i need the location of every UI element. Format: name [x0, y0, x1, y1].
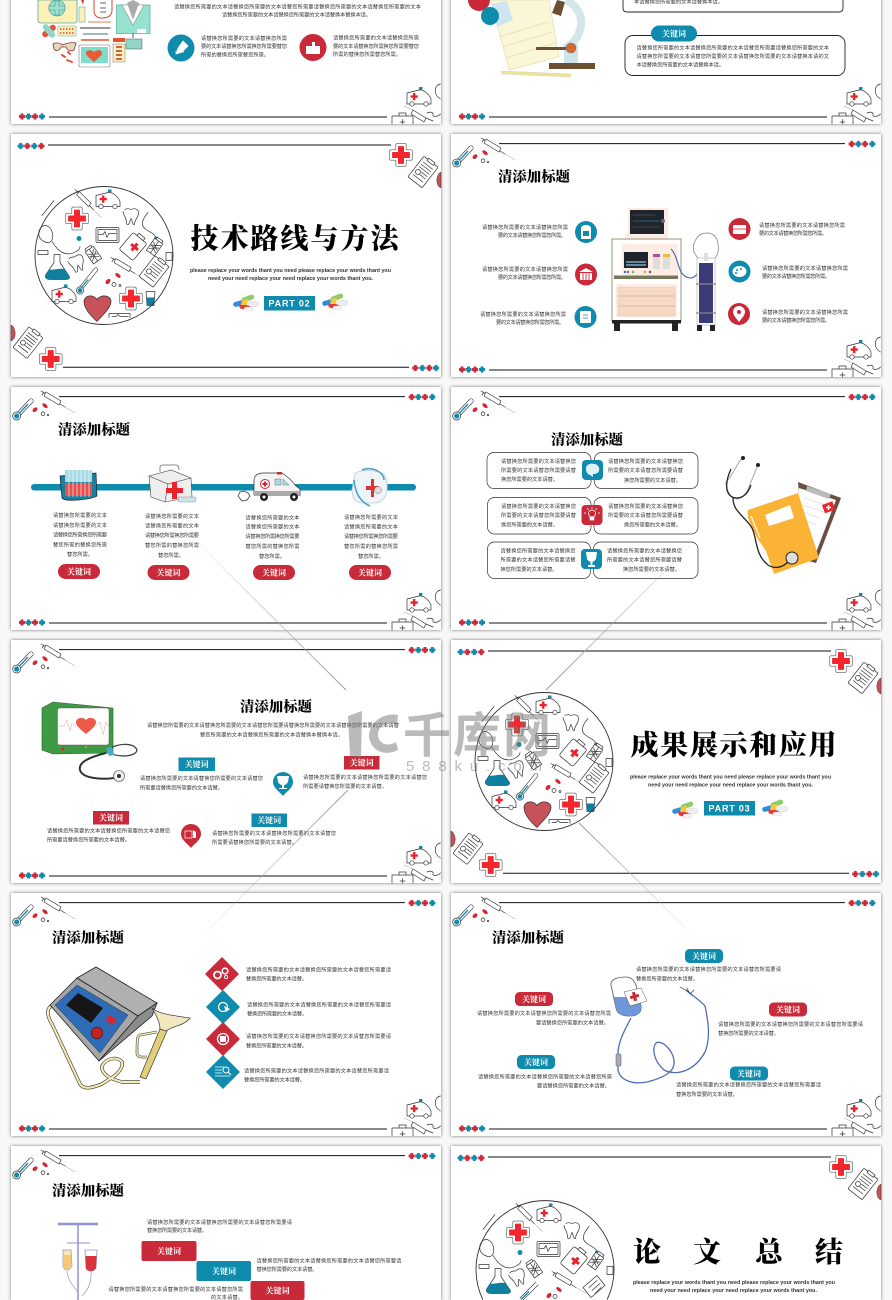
keyword: left lower: 关键词: [524, 1057, 548, 1067]
panel: IV stand slide: [11, 1146, 441, 1300]
text block: left items: 要的文本请替换您所需您所需。: [496, 318, 564, 326]
text block: step 2: 替您所需的替换您所需: [145, 541, 199, 549]
illustration: ambulance: [254, 472, 301, 501]
text block: item 2: 请替换您所需要的文本请替换您所需要的文本请替您所需要请: [256, 1257, 402, 1265]
keyword tag: teal bottom: 关键词: [257, 815, 281, 825]
box row 2: 换您所需要的文本请替。: [624, 520, 681, 528]
text block: item top right: 请替换您所需要的文本请替换您所需要的文本请替您: [303, 773, 427, 781]
keyword block: teal: [196, 1261, 251, 1281]
box row 3: 请替换您所需要的文本请替换您: [607, 546, 682, 554]
box row 3: 换您所需要的文本请替。: [500, 565, 558, 573]
text block: item 3: [246, 1032, 391, 1049]
text block: step 2: 请替换您所需要的文本: [145, 512, 199, 520]
text block: step 4: 替您所需的替换您所需: [344, 542, 398, 550]
text block: hand item: 要的文本请替换您所需换您所需要替您: [333, 42, 419, 50]
illustration: medical doodle disc: [35, 186, 173, 324]
icons: left circles: [574, 221, 597, 328]
text block: step 3: 替您所需的替换您所需: [246, 542, 300, 550]
text block: step 2: 请替换您所需换您所需要: [145, 531, 199, 539]
text block: left items: 要的文本请替换您所需您所需。: [498, 231, 566, 239]
keyword pill: step 2: [148, 565, 190, 580]
text block: intro paragraph: [147, 721, 399, 738]
icon: teal pen circle: [168, 34, 194, 62]
panel: section slide conclusion: [451, 1146, 881, 1300]
text block: intro paragraph: 请替换您所需要的文本请替换您所需要的文本请替换本替换本请。: [222, 10, 371, 18]
text block: item bottom left: 所需要请替换您所需要的文本请替。: [47, 835, 130, 843]
text block: English subtitle: please replace your words thant you need please replace your words thant you: [190, 268, 391, 274]
text block: item top left: 所需要请替换您所需要的文本请替。: [140, 783, 223, 791]
text block: item 3: 请替换您所需要的文本请替换您所需要的文本请替您所需: [108, 1285, 243, 1293]
icon: small cloud: [238, 491, 250, 501]
text block: step 3: 请替换您所需要的文本: [246, 513, 300, 521]
watermark: diagonal lines: [200, 545, 693, 935]
callout: second text box: 请替换您所需要的文本请替换您所需要的文本请替您所需要请替换您所需要的文本: [636, 43, 829, 51]
text block: item top right: 所需要请替换您所需要的文本请替。: [303, 782, 387, 790]
panel: section slide PART 03: [451, 640, 881, 883]
text block: English subtitle: please replace your words thant you need please replace your words thant you: [630, 774, 831, 780]
text block: item 1: [147, 1218, 292, 1234]
text block: pen item: 要的文本请替换您所需换您所需要替您: [201, 42, 287, 50]
callout: second text box: 本请替换您所需要的文本请替换本请。: [636, 60, 724, 68]
text block: left items: 请替换您所需要的文本请替换您所需: [482, 223, 568, 231]
heading: section title: 总: [755, 1236, 785, 1268]
text block: right items: 请替换您所需要的文本请替换您所需: [762, 264, 848, 272]
heading: 清添加标题: [52, 928, 125, 946]
text block: item 1: 请替换您所需要的文本请替换您所需要的文本请替您所需要请: [147, 1218, 292, 1226]
text block: left items: [480, 223, 568, 326]
icon: brain: [582, 460, 603, 480]
keyword tag: red bottom: [93, 811, 129, 824]
text block: top item: [636, 965, 781, 982]
text block: step 3: 替您所需。: [259, 552, 285, 560]
box row 3: 换您所需要的文本请替。: [623, 565, 680, 573]
text block: item 2: [247, 1000, 391, 1017]
keyword: left lower: [517, 1055, 555, 1069]
panel: device slide: [11, 893, 441, 1136]
keyword block: red: [142, 1241, 196, 1261]
keyword: right lower: 关键词: [737, 1069, 761, 1079]
text block: right items: 要的文本请替换您所需您所需。: [759, 229, 827, 237]
keyword tag: red bottom: 关键词: [99, 813, 123, 823]
text block: English subtitle: need your need replace your need replace your words thant you.: [650, 1288, 818, 1294]
illustration: flat medical icon set: [38, 0, 150, 67]
text block: item 2: 请替换您所需要的文本请替换您所需要的文本请替您所需要请: [247, 1000, 391, 1008]
text block: item top left: 请替换您所需要的文本请替换您所需要的文本请替您: [140, 774, 263, 782]
text block: hand item: 请替换您所需要的文本请替换您所需: [333, 33, 419, 41]
illustration: anesthesia machine: [612, 208, 718, 331]
panel: IV bag slide: [451, 893, 881, 1136]
panel: section slide PART 02: [11, 134, 441, 377]
text block: item 1: 替换您所需要的文本请替。: [147, 1226, 207, 1234]
keyword pill: 关键词: [662, 29, 686, 39]
panel: timeline slide: [11, 387, 441, 630]
icon: teal refresh diamond: [207, 991, 239, 1023]
keyword block: red lower: [250, 1281, 304, 1300]
panel: monitor keywords slide: [11, 640, 441, 883]
keyword pill: step 1: 关键词: [67, 566, 91, 576]
text block: hand item: [333, 33, 419, 58]
keyword tag: red top: 关键词: [350, 758, 374, 768]
keyword pill: step 3: [253, 565, 295, 580]
illustration: therapy device: [48, 967, 190, 1088]
text block: pen item: [201, 34, 287, 58]
icon: pills right: [322, 293, 348, 310]
text block: item 3: [108, 1285, 243, 1300]
text block: left items: 请替换您所需要的文本请替换您所需: [480, 310, 566, 318]
text block: item bottom right: 请替换您所需要的文本请替换您所需要的文本请替您: [212, 829, 336, 837]
text block: intro paragraph: 替您所需要的文本请替换您所需要的文本请替换本替换本请。: [200, 730, 343, 738]
illustration: stethoscope and folder: [726, 456, 841, 574]
text block: right items: 请替换您所需要的文本请替换您所需: [759, 221, 845, 229]
text block: English subtitle: [630, 774, 831, 788]
box row 2: 所需要的文本请替您所需要请替: [501, 511, 576, 519]
text block: right items: 请替换您所需要的文本请替换您所需: [762, 308, 848, 316]
text block: left upper item: [477, 1009, 611, 1026]
box row 1: 所需要的文本请替您所需要请替: [608, 466, 683, 474]
heading: 清添加标题: [52, 1182, 125, 1200]
panel: slide 1 left, medical icons and text: [11, 0, 441, 124]
text block: pen item: 请替换您所需要的文本请替换您所需: [201, 34, 287, 42]
text block: item top left: [140, 774, 263, 791]
text block: step 4: 替您所需。: [358, 552, 384, 560]
text block: top item: 请替换您所需要的文本请替换您所需要的文本请替您所需要请: [636, 965, 781, 973]
heading: section title: 文: [693, 1236, 721, 1268]
box row 3: 所需要的文本请替您所需要请替: [500, 555, 576, 563]
text block: left items: 要的文本请替换您所需您所需。: [498, 273, 566, 281]
keyword: top: [685, 949, 723, 963]
text block: item 2: 替换您所需要的文本请替。: [247, 1009, 307, 1017]
badge: PART 02: [264, 296, 315, 310]
keyword tag: teal top: 关键词: [185, 759, 209, 769]
watermark: logo: 千库网: [403, 696, 551, 766]
text block: item 4: 请替换您所需要的文本请替换您所需要的文本请替您所需要请: [244, 1066, 389, 1074]
keyword: top: 关键词: [692, 951, 716, 961]
illustration: blood tubes: [60, 470, 97, 500]
text block: step 4: 请替换您所需换您所需要: [344, 532, 398, 540]
text block: item 3: 请替换您所需要的文本请替换您所需要的文本请替您所需要请: [246, 1032, 391, 1040]
text block: step 1: 请替换您所需要的文本: [53, 521, 107, 529]
text block: item 3: 替换您所需要的文本请替。: [246, 1041, 307, 1049]
icon: red hand circle: [300, 34, 326, 61]
icon: red hand pin: [181, 824, 201, 848]
keyword: right upper: [769, 1002, 807, 1016]
icon: red gauge diamond: [207, 1023, 239, 1055]
illustration: medical doodle disc: [476, 1201, 614, 1300]
text block: hand item: 所需的替换您所需替您所需。: [333, 50, 401, 58]
icon: pills left: [233, 294, 259, 311]
keyword pill: step 4: [349, 565, 391, 580]
icon: pills left: [672, 801, 698, 818]
text block: English subtitle: need your need replace your need replace your words thant you.: [208, 276, 374, 282]
icon: teal search diamond: [207, 1056, 239, 1088]
text block: intro paragraph: [174, 3, 421, 18]
heading: section title: 论: [633, 1236, 661, 1268]
box row 1: 所需要的文本请替您所需要请替: [501, 466, 576, 474]
icon: light bulb: [582, 505, 602, 525]
text block: step 1: 请替换您所需换您所需要: [53, 531, 107, 539]
icon: red gears diamond: [206, 958, 238, 990]
text block: item 4: 替换您所需要的文本请替。: [244, 1075, 305, 1083]
text block: left lower item: 请替换您所需要的文本请替换您所需要的文本请替您所需: [478, 1072, 612, 1080]
text block: item 4: [244, 1066, 389, 1083]
illustration: IV drip bag and tube: [611, 977, 708, 1083]
text block: right items: [759, 221, 848, 324]
box row 3: [488, 542, 698, 578]
text block: step 1: 替您所需。: [67, 550, 93, 558]
keyword block: red: 关键词: [157, 1246, 181, 1256]
text block: item 1: 请替换您所需要的文本请替换您所需要的文本请替您所需要请: [246, 965, 391, 973]
text block: step 1: 替您所需的替换您所需: [53, 540, 107, 548]
heading: 清添加标题: [498, 168, 571, 186]
text block: right upper item: 请替换您所需要的文本请替换您所需要的文本请替您所需要请: [718, 1020, 863, 1028]
keyword tag: red top: [344, 756, 380, 770]
callout: second text box: [625, 36, 845, 76]
box row 2: 请替换您所需要的文本请替换您: [608, 502, 683, 510]
box row 2: 换您所需要的文本请替。: [501, 520, 558, 528]
keyword: left upper: [515, 992, 553, 1006]
keyword pill: [651, 26, 697, 42]
icon: teal trophy pin: [273, 772, 293, 796]
heading: section title: 成果展示和应用: [630, 730, 836, 762]
keyword: right lower: [730, 1066, 768, 1080]
text block: left upper item: 要请替换您所需要的文本请替。: [536, 1018, 609, 1026]
watermark: logo: 588ku.com: [406, 758, 542, 775]
box row 1: 请替换您所需要的文本请替换您: [501, 457, 576, 465]
box row 2: 请替换您所需要的文本请替换您: [501, 502, 576, 510]
icons: right circles: [728, 218, 750, 325]
heading: 清添加标题: [58, 420, 131, 438]
heading: section title: [633, 1236, 843, 1268]
keyword tag: teal top: [178, 758, 215, 771]
text block: step 2: 请替换您所需要的文本: [145, 521, 199, 529]
text block: item 2: [256, 1257, 402, 1273]
keyword pill: step 3: 关键词: [262, 568, 286, 578]
text block: item 2: 替换您所需要的文本请替。: [256, 1265, 318, 1273]
text block: item bottom right: 所需要请替换您所需要的文本请替。: [212, 838, 297, 846]
heading: section title: 技术路线与方法: [190, 222, 401, 255]
text block: step 2: 替您所需。: [158, 551, 184, 559]
keyword: right upper: 关键词: [776, 1005, 800, 1015]
text block: right lower item: 请替换您所需要的文本请替换您所需要的文本请替您所需要请: [676, 1080, 821, 1088]
text block: English subtitle: [633, 1280, 835, 1294]
heading: 清添加标题: [240, 698, 313, 716]
keyword block: teal: 关键词: [212, 1266, 236, 1276]
text block: English subtitle: [190, 268, 391, 282]
icon: trophy: [581, 549, 602, 569]
box row 1: 换您所需要的文本请替。: [501, 475, 558, 483]
box row 2: [488, 498, 698, 534]
text block: right upper item: 替换您所需要的文本请替。: [718, 1029, 779, 1037]
text block: item bottom right: [212, 829, 336, 846]
panel: anesthesia machine slide: [451, 134, 881, 377]
text block: left upper item: 请替换您所需要的文本请替换您所需要的文本请替您所需: [477, 1009, 611, 1017]
callout: second text box: 请替换您所需要的文本请替您所需要的文本请替换您所需要的文本请替换本请的文: [636, 52, 830, 60]
heading: section title: 结: [815, 1236, 843, 1268]
illustration: first aid kit: [149, 465, 196, 502]
text block: step 3: 请替换您所需要的文本: [246, 522, 300, 530]
text block: left items: 请替换您所需要的文本请替换您所需: [482, 265, 568, 273]
keyword: left upper: 关键词: [522, 994, 546, 1004]
panel: slide 1 right, microscope and keyword boxes: [451, 0, 881, 124]
text block: step 3: 请替换您所需换您所需要: [246, 532, 300, 540]
text block: English subtitle: need your need replace your need replace your words thant you.: [648, 782, 814, 788]
keyword pill: step 2: 关键词: [156, 568, 180, 578]
text block: item top right: [303, 773, 427, 790]
box row 1: 换您所需要的文本请替。: [624, 476, 681, 484]
text block: left lower item: 要请替换您所需要的文本请替。: [537, 1081, 610, 1089]
keyword block: red lower: 关键词: [266, 1286, 290, 1296]
illustration: stethoscope on kit: [352, 469, 387, 506]
heading: 清添加标题: [492, 928, 565, 946]
text block: step 4: [344, 513, 398, 560]
text block: step 1: 请替换您所需要的文本: [53, 511, 107, 519]
text block: left lower item: [478, 1072, 612, 1089]
icon: pills right: [762, 799, 788, 816]
keyword pill: step 4: 关键词: [358, 568, 382, 578]
panel: text boxes and folder slide: [451, 387, 881, 630]
text block: step 1: [53, 511, 107, 558]
box row 2: 所需要的文本请替您所需要请替: [608, 511, 683, 519]
keyword tag: teal bottom: [252, 814, 287, 827]
text block: item 1: 替换您所需要的文本请替。: [246, 974, 307, 982]
heading: 清添加标题: [551, 430, 624, 448]
text block: intro paragraph: 请替换您所需要的文本请替换您所需要的文本请替您所需要请替换您所需要的文本请替换您所需要的文本请替: [147, 721, 399, 729]
badge: PART 02: PART 02: [269, 298, 310, 308]
callout: first text box: [623, 0, 843, 12]
watermark: logo: [348, 696, 551, 775]
text block: English subtitle: please replace your words thant you need please replace your words thant you: [633, 1280, 835, 1286]
text block: top item: 替换您所需要的文本请替。: [636, 974, 698, 982]
text block: item bottom left: [47, 826, 170, 843]
text block: item 1: [246, 965, 391, 982]
illustration: IV stand with bags: [58, 1224, 98, 1300]
text block: right lower item: [676, 1080, 821, 1098]
text block: intro paragraph: 请替换您所需要的文本请替换您所需要的文本请替您所需要请替换您所需要的文本请替换您所需要的文本: [174, 3, 421, 11]
badge: PART 03: PART 03: [709, 804, 750, 814]
text block: step 2: [145, 512, 199, 559]
illustration: medical doodle disc: [475, 692, 613, 830]
text block: right items: 要的文本请替换您所需您所需。: [762, 272, 830, 280]
box row 3: 所需要的文本请替您所需要请替: [607, 555, 682, 563]
illustration: microscope with paper: [468, 0, 595, 77]
text block: right lower item: 替换您所需要的文本请替。: [676, 1090, 738, 1098]
box row 1: [487, 452, 698, 488]
text block: step 4: 请替换您所需要的文本: [344, 522, 398, 530]
text block: right items: 要的文本请替换您所需您所需。: [762, 316, 830, 324]
text block: right upper item: [718, 1020, 863, 1037]
badge: PART 03: [704, 801, 755, 816]
box row 3: 请替换您所需要的文本请替换您: [500, 546, 576, 554]
text block: step 3: [246, 513, 300, 560]
text block: pen item: 所需的替换您所需替您所需。: [201, 50, 269, 58]
timeline bar: [31, 484, 416, 490]
box row 1: 请替换您所需要的文本请替换您: [608, 457, 683, 465]
text block: item bottom left: 请替换您所需要的文本请替换您所需要的文本请替您: [47, 826, 170, 834]
illustration: heart monitor with stethoscope: [42, 702, 137, 782]
keyword pill: step 1: [58, 564, 100, 579]
text block: step 4: 请替换您所需要的文本: [344, 513, 398, 521]
